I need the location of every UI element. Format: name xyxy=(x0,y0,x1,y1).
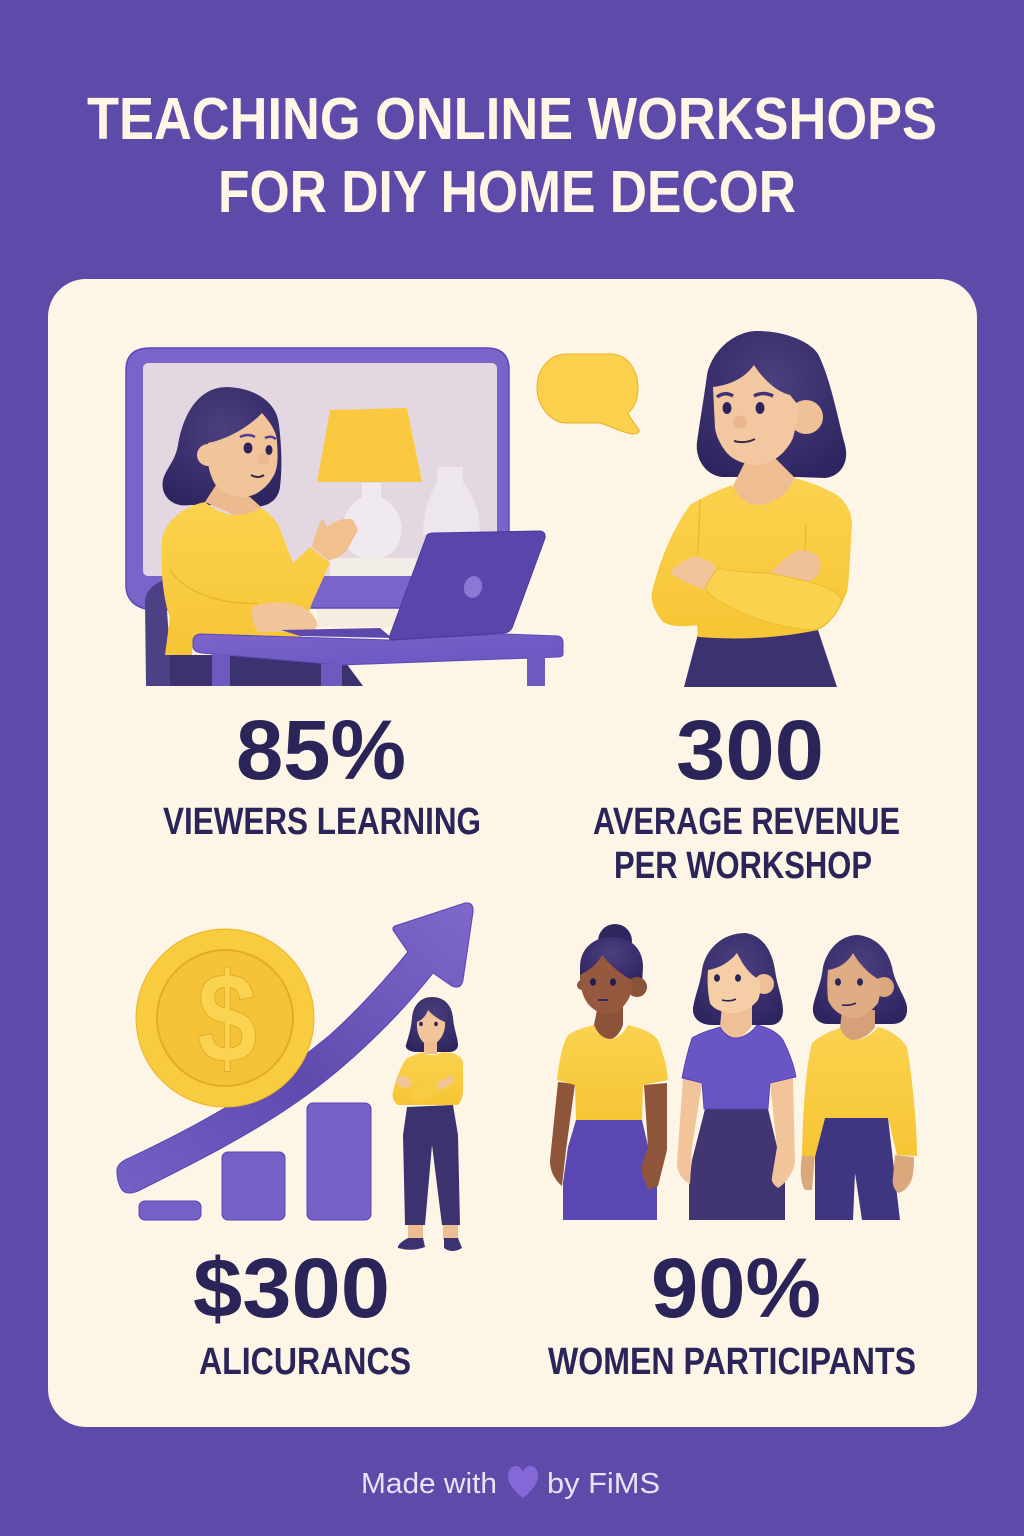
stat: 90% women participants: WOMEN PARTICIPANTS xyxy=(548,1341,916,1383)
illustration: woman teaching online xyxy=(126,348,563,686)
stat: 85% viewers learning: 85% xyxy=(236,703,406,797)
title: FOR DIY HOME DECOR xyxy=(218,159,796,225)
participant: woman with bun xyxy=(550,924,668,1220)
stat: 90% women participants xyxy=(548,1241,916,1383)
stat: 85% viewers learning: VIEWERS LEARNING xyxy=(163,801,481,843)
panel: stats card xyxy=(48,279,977,1427)
stat: $300 alicurancs: ALICURANCS xyxy=(199,1341,411,1383)
illustration: woman with crossed arms xyxy=(652,331,852,687)
footer credit xyxy=(361,1466,660,1500)
stat: 90% women participants: 90% xyxy=(651,1241,821,1335)
footer credit: Made with xyxy=(361,1468,497,1500)
participant: woman in purple top xyxy=(677,933,796,1220)
stat: $300 alicurancs: $300 xyxy=(193,1241,390,1335)
title: TEACHING ONLINE WORKSHOPS xyxy=(87,86,937,152)
stat: $300 alicurancs xyxy=(193,1241,411,1383)
illustration: three women participants xyxy=(550,924,917,1220)
icon: dollar coin: $ xyxy=(197,947,257,1090)
icon: heart xyxy=(508,1466,538,1498)
stat: 300 average revenue per workshop xyxy=(593,703,900,887)
stat: 85% viewers learning xyxy=(163,703,481,843)
chart: rising bars and arrow xyxy=(117,903,473,1220)
illustration: small standing woman xyxy=(393,997,463,1251)
icon: dollar coin xyxy=(136,929,314,1107)
stat: 300 average revenue per workshop: 300 xyxy=(676,703,824,797)
icon: speech bubble xyxy=(537,354,639,434)
title xyxy=(87,86,937,225)
stat: 300 average revenue per workshop: AVERAGE REVENUE xyxy=(593,801,900,843)
stat: 300 average revenue per workshop: PER WORKSHOP xyxy=(614,845,872,887)
footer credit: by FiMS xyxy=(547,1468,660,1500)
participant: woman in yellow long sleeves xyxy=(801,935,917,1220)
